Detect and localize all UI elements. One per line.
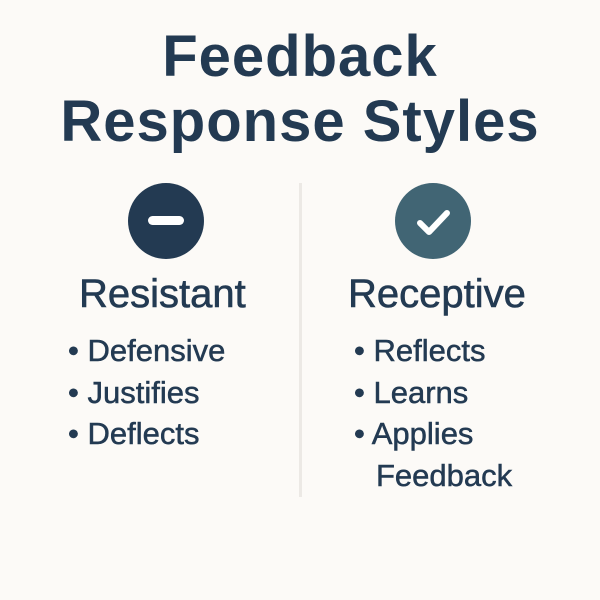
- title: [60, 24, 540, 154]
- list: receptive: • Applies: [354, 416, 473, 451]
- list: receptive: • Learns: [354, 374, 468, 410]
- divider: [299, 183, 302, 497]
- heading: Receptive: Receptive: [348, 272, 526, 316]
- title: Response Styles: [60, 89, 540, 154]
- icon: check circle: [395, 183, 471, 259]
- list: resistant: • Justifies: [68, 374, 199, 410]
- heading: Resistant: Resistant: [79, 272, 246, 316]
- icon: minus circle: [128, 183, 204, 259]
- list: receptive: • Reflects: [354, 333, 485, 368]
- title: Feedback: [162, 24, 438, 89]
- list: receptive: [354, 333, 513, 492]
- list: resistant: • Deflects: [68, 416, 199, 451]
- list: resistant: • Defensive: [68, 333, 225, 368]
- list: resistant: [68, 333, 225, 451]
- list: receptive: Feedback: [376, 458, 512, 492]
